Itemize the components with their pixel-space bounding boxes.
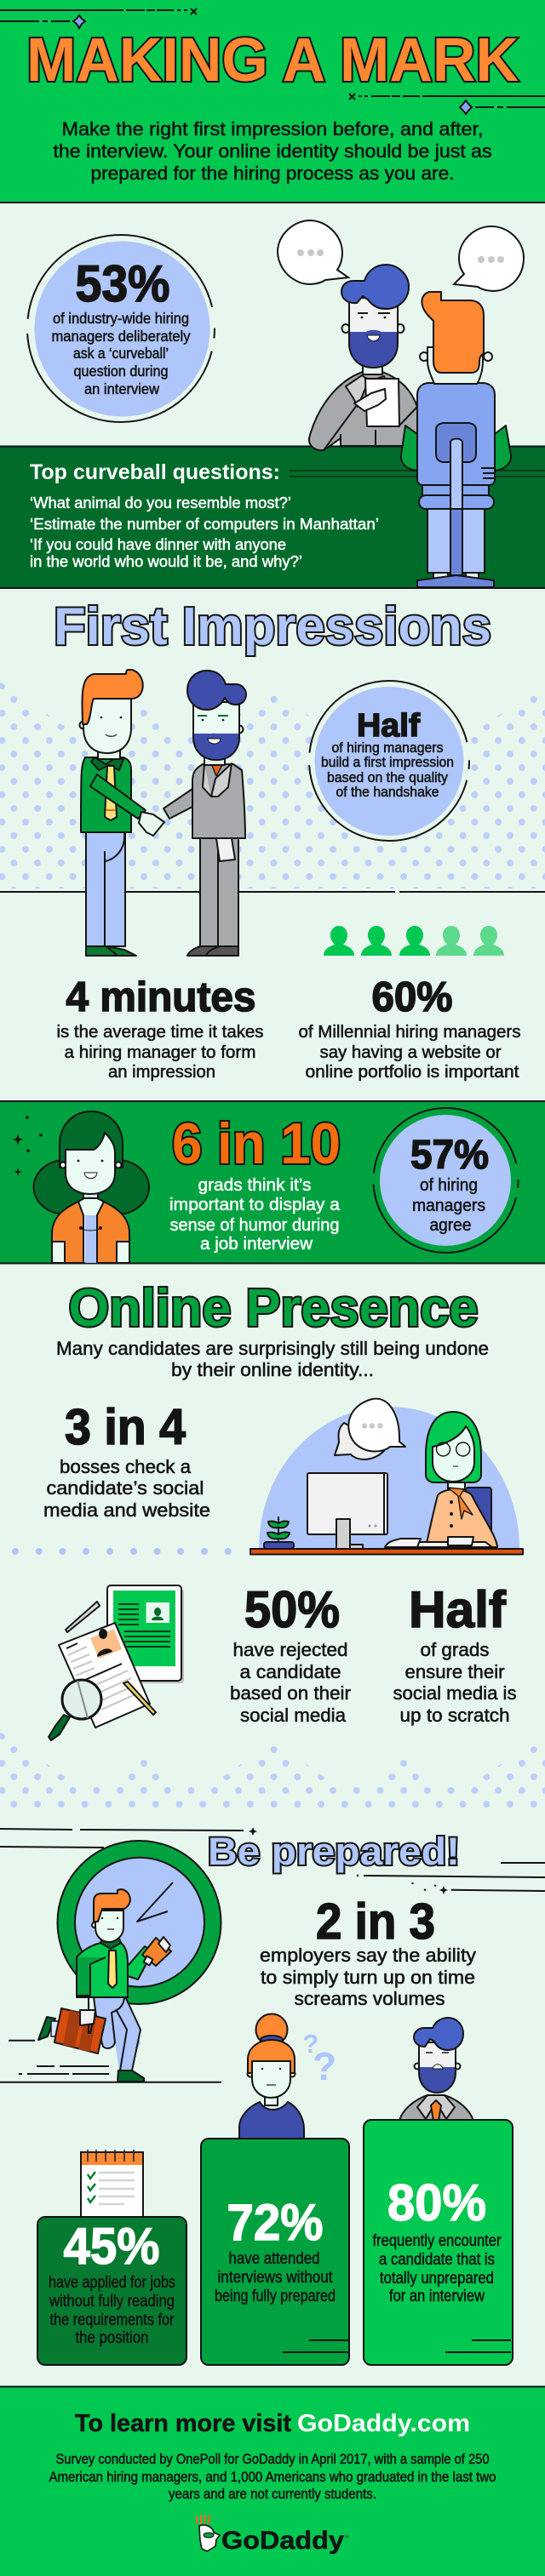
illustration: resume, tablet, magnifier	[49, 1585, 184, 1740]
intro text: online identity: by their online identity...	[171, 1359, 374, 1380]
stat: 60%: say having a website or	[320, 1042, 502, 1062]
stat: 6 in 10: sense of humor during	[170, 1215, 339, 1235]
callout: half of hiring managers circle: based on the quality	[327, 770, 449, 785]
intro text: prepared for the hiring process as you are.	[90, 163, 455, 184]
stat: 6 in 10: 6 in 10	[172, 1111, 341, 1176]
call to action	[75, 2410, 470, 2437]
stat: 3 in 4: candidate’s social	[46, 1477, 204, 1499]
callout: 53% circle: ask a ‘curveball’	[73, 345, 169, 362]
heading: online presence: Online Presence	[68, 1279, 479, 1338]
stat: 50%: social media	[240, 1705, 347, 1726]
question marks	[303, 2029, 336, 2088]
stat: 60%	[298, 974, 521, 1082]
dotted pattern band	[0, 1732, 545, 1811]
stat: 50%: a candidate	[240, 1661, 341, 1682]
card: 80%: a candidate that is	[379, 2250, 495, 2269]
icon: five people, three highlighted	[324, 926, 504, 956]
stat: 60%: of Millennial hiring managers	[298, 1022, 521, 1042]
dotted row	[12, 1548, 232, 1555]
stat: 50%	[230, 1581, 351, 1726]
stat: 50%: 50%	[244, 1581, 340, 1638]
logo: godaddy	[197, 2515, 349, 2555]
callout: 53% circle: 53%	[75, 255, 170, 312]
stat: half of grads: ensure their	[405, 1661, 504, 1682]
illustration: bearded man behind card	[399, 2018, 473, 2121]
logo: godaddy: GoDaddy	[221, 2527, 344, 2555]
monitor	[307, 1473, 387, 1549]
intro text: the interview. Your online identity should be just as	[53, 140, 492, 162]
stat: 2 in 3: employers say the ability	[260, 1945, 476, 1966]
callout: 53% circle	[27, 235, 215, 422]
question marks: ?	[303, 2029, 318, 2059]
icon: sparkles	[12, 1116, 43, 1176]
card: 45%: 45%	[63, 2218, 160, 2275]
card: 72%: have attended	[228, 2249, 320, 2268]
survey note: American hiring managers, and 1,000 Americans who graduated in the last two	[49, 2469, 496, 2485]
call to action: GoDaddy.com	[297, 2410, 470, 2437]
callout: 57% circle: managers	[412, 1196, 485, 1215]
icon: checklist notepad	[81, 2150, 143, 2219]
ground line	[0, 891, 545, 893]
question list: in the world who would it be, and why?’	[30, 552, 302, 570]
stat: 4 minutes: 4 minutes	[66, 974, 255, 1020]
illustration: handshake man with orange hair	[80, 670, 164, 956]
callout: half of hiring managers circle: of hiring managers	[332, 740, 443, 756]
illustration: woman at computer	[250, 1399, 523, 1554]
illustration: woman with green hair	[34, 1111, 149, 1263]
stat: 6 in 10: important to display a	[169, 1195, 341, 1214]
head	[92, 1922, 97, 1928]
card: 80%: 80%	[387, 2174, 486, 2231]
icon: speech bubble left	[278, 220, 348, 284]
illustration: woman with bun and question marks	[239, 2013, 336, 2139]
question list: ‘Estimate the number of computers in Manhattan’	[30, 515, 379, 533]
card: 80%: frequently encounter	[373, 2231, 502, 2250]
card: 45%: the position	[75, 2328, 148, 2347]
card: 80%: totally unprepared	[380, 2269, 494, 2288]
card: 72%: interviews without	[218, 2268, 333, 2287]
card: 45%: the requirements for	[49, 2310, 175, 2329]
stat: 50%: based on their	[230, 1682, 351, 1704]
question list: ‘If you could have dinner with anyone	[30, 535, 286, 553]
panel: top curveball questions band	[0, 446, 545, 588]
stat: 2 in 3: screams volumes	[295, 1988, 445, 2009]
stat: 2 in 3: to simply turn up on time	[261, 1967, 475, 1988]
stat: 6 in 10: a job interview	[200, 1234, 313, 1254]
intro text: online identity: Many candidates are surprisingly still being undone	[56, 1338, 489, 1359]
call to action: To learn more visit	[75, 2410, 291, 2437]
card: 80%	[364, 2120, 513, 2365]
callout: half of hiring managers circle: of the handshake	[336, 785, 439, 800]
intro text: Make the right first impression before, and after,	[61, 118, 484, 140]
stat: 4 minutes: is the average time it takes	[56, 1022, 264, 1042]
stat: 3 in 4: media and website	[43, 1499, 210, 1521]
callout: 57% circle	[373, 1108, 518, 1253]
heading: first impressions: First Impressions	[54, 597, 491, 656]
icon: speech bubble right	[454, 226, 524, 291]
stat: half of grads: Half	[409, 1581, 507, 1638]
dotted background pattern	[0, 682, 545, 888]
intro text: online identity	[56, 1338, 489, 1380]
logo: godaddy: TM	[344, 2534, 349, 2539]
heading: be prepared: Be prepared!	[208, 1830, 460, 1873]
panel: footer	[0, 2386, 545, 2576]
stat: half of grads: up to scratch	[400, 1705, 509, 1726]
stat: half of grads: social media is	[393, 1682, 516, 1704]
stat: 60%: 60%	[371, 974, 453, 1020]
card: 72%: 72%	[227, 2194, 324, 2251]
card: 80%: for an interview	[389, 2287, 485, 2305]
callout: half of hiring managers circle: Half	[357, 708, 420, 744]
torso	[77, 1943, 152, 1997]
question list: ‘What animal do you resemble most?’	[30, 494, 291, 511]
chair	[466, 1488, 491, 1539]
book	[142, 1937, 171, 1966]
stat: 50%: have rejected	[233, 1639, 347, 1660]
stat: 4 minutes	[56, 974, 264, 1082]
card: 45%	[37, 2217, 186, 2365]
panel: header	[0, 0, 545, 203]
card: 45%: without fully reading	[49, 2292, 175, 2310]
card: 72%: being fully prepared	[215, 2287, 336, 2305]
clock	[58, 1841, 221, 2004]
stat: 6 in 10	[169, 1111, 341, 1254]
callout: 57% circle: of hiring	[420, 1175, 478, 1195]
stat: 3 in 4	[43, 1399, 210, 1521]
callout: 57% circle: 57%	[410, 1133, 489, 1178]
stat: 4 minutes: a hiring manager to form	[65, 1042, 255, 1062]
suitcase	[54, 2008, 106, 2053]
stat: 60%: online portfolio is important	[305, 1062, 519, 1082]
plant	[264, 1516, 294, 1549]
callout: 53% circle: an interview	[84, 380, 159, 397]
stat: half of grads	[393, 1581, 516, 1726]
callout: half of hiring managers circle: build a first impression	[321, 755, 454, 770]
callout: half of hiring managers circle	[309, 681, 469, 841]
card: 72%	[201, 2139, 349, 2365]
callout: 53% circle: managers deliberately	[51, 328, 191, 345]
speed lines around be prepared	[0, 1827, 545, 1894]
illustration: interviewer with beard	[309, 265, 417, 450]
desk	[250, 1549, 523, 1554]
stat: 4 minutes: an impression	[108, 1062, 215, 1082]
callout: 53% circle: question during	[73, 363, 169, 380]
stat: 3 in 4: 3 in 4	[65, 1399, 186, 1455]
question marks: ?	[313, 2044, 336, 2088]
illustration: handshake man with blue beard	[164, 671, 246, 956]
speech bubbles	[335, 1399, 405, 1459]
stat: half of grads: of grads	[421, 1639, 489, 1660]
question list	[30, 494, 379, 570]
card: 45%: have applied for jobs	[49, 2273, 175, 2292]
band heading: Top curveball questions:	[30, 460, 280, 484]
survey note: Survey conducted by OnePoll for GoDaddy in April 2017, with a sample of 250	[56, 2451, 489, 2467]
illustration: running man and clock	[0, 1841, 221, 2082]
callout: 57% circle: agree	[429, 1215, 472, 1235]
callout: 53% circle: of industry-wide hiring	[53, 310, 189, 327]
title: MAKING A MARK	[26, 26, 519, 94]
woman	[385, 1412, 497, 1547]
survey note: years and are not currently students.	[169, 2486, 376, 2502]
intro text	[53, 118, 492, 184]
stat: 2 in 3: 2 in 3	[316, 1893, 435, 1950]
panel: 6 in 10 band	[0, 1101, 545, 1263]
stat: 2 in 3	[260, 1893, 476, 2009]
illustration: candidate seen from behind on chair	[401, 292, 511, 587]
stat: 3 in 4: bosses check a	[60, 1456, 192, 1477]
survey note	[49, 2451, 496, 2502]
stat: 6 in 10: grads think it’s	[198, 1175, 312, 1195]
